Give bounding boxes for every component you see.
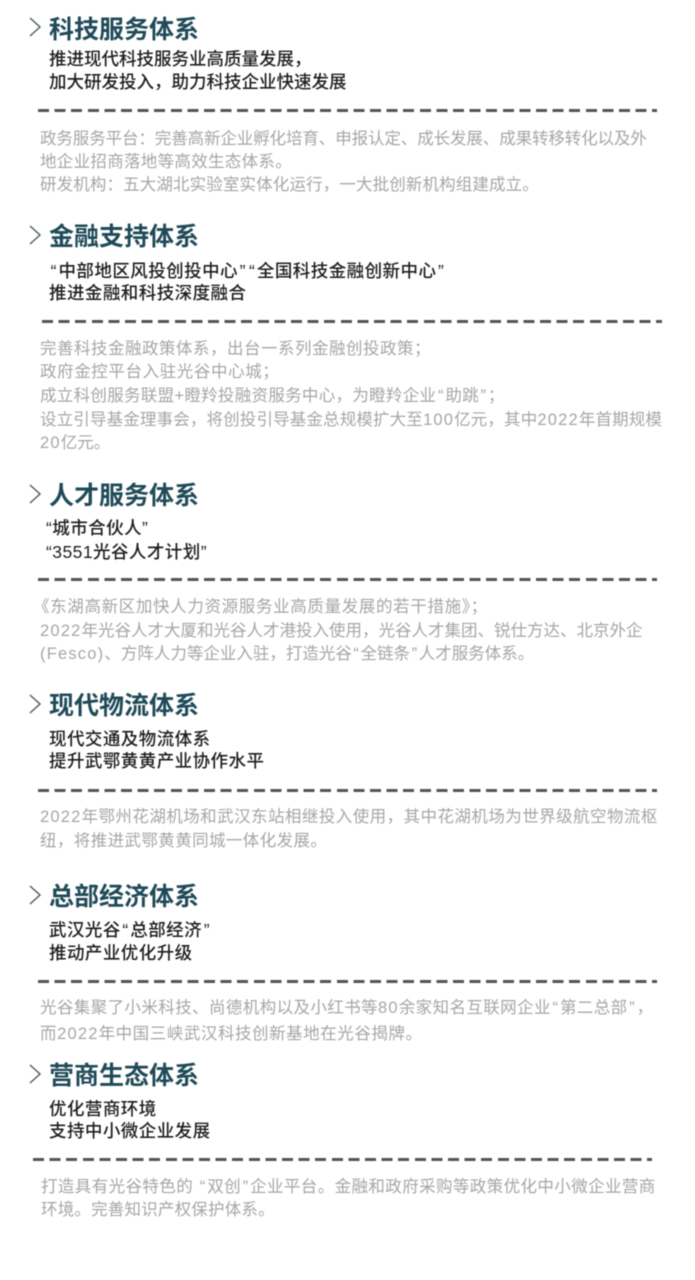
body text	[40, 129, 647, 194]
heading: 营商生态体系	[49, 1062, 199, 1090]
heading: 金融支持体系	[49, 223, 199, 251]
subheading	[48, 261, 444, 303]
panel: 现代物流体系	[29, 692, 658, 850]
subheading: 武汉光谷“总部经济”	[49, 920, 210, 940]
body text: 打造具有光谷特色的 “双创”企业平台。金融和政府采购等政策优化中小微企业营商	[41, 1178, 656, 1196]
divider	[38, 980, 657, 982]
subheading: “中部地区风投创投中心”“全国科技金融创新中心”	[51, 261, 444, 281]
body text	[40, 998, 654, 1043]
heading: 总部经济体系	[49, 883, 199, 911]
icon: chevron	[29, 885, 42, 905]
subheading	[48, 49, 346, 92]
body text	[33, 597, 643, 663]
body text: 地企业招商落地等高效生态体系。	[40, 153, 292, 171]
subheading: 支持中小微企业发展	[49, 1121, 211, 1141]
body text: (Fesco)、方阵人力等企业入驻，打造光谷“全链条”人才服务体系。	[40, 645, 534, 663]
body text: 20亿元。	[40, 434, 110, 452]
icon: chevron	[29, 225, 42, 245]
icon: chevron	[29, 484, 42, 504]
body text: 纽，将推进武鄂黄黄同城一体化发展。	[40, 832, 327, 850]
subheading: 推进现代科技服务业高质量发展，	[49, 49, 312, 69]
subheading	[46, 518, 207, 562]
body text: 光谷集聚了小米科技、尚德机构以及小红书等80余家知名互联网企业“第二总部”，	[40, 999, 654, 1017]
body text: 环境。完善知识产权保护体系。	[41, 1201, 275, 1219]
subheading	[49, 1099, 211, 1141]
panel: 总部经济体系	[29, 882, 658, 1043]
panel: 人才服务体系	[29, 482, 658, 663]
subheading	[48, 920, 210, 963]
body text: 《东湖高新区加快人力资源服务业高质量发展的若干措施》；	[33, 598, 488, 616]
icon: chevron	[29, 17, 42, 37]
body text	[40, 339, 662, 452]
icon: chevron	[29, 1064, 42, 1084]
subheading: 现代交通及物流体系	[49, 729, 211, 749]
divider	[33, 1158, 652, 1160]
divider	[38, 789, 657, 792]
heading: 现代物流体系	[49, 692, 199, 720]
subheading: 推进金融和科技深度融合	[49, 283, 246, 303]
body text	[40, 807, 658, 850]
heading: 科技服务体系	[49, 16, 199, 44]
divider	[38, 578, 657, 580]
subheading	[48, 729, 264, 771]
body text: 研发机构：五大湖北实验室实体化运行，一大批创新机构组建成立。	[40, 176, 539, 194]
divider	[38, 109, 657, 112]
subheading: 加大研发投入，助力科技企业快速发展	[49, 72, 346, 92]
panel: 金融支持体系	[29, 222, 663, 452]
panel: 营商生态体系	[29, 1061, 656, 1219]
body text: 而2022年中国三峡武汉科技创新基地在光谷揭牌。	[40, 1025, 423, 1043]
divider	[42, 320, 662, 322]
panel: 科技服务体系	[29, 16, 658, 194]
body text: 2022年光谷人才大厦和光谷人才港投入使用，光谷人才集团、锐仕方达、北京外企	[40, 622, 643, 640]
subheading: “城市合伙人”	[46, 518, 148, 538]
body text: 完善科技金融政策体系，出台一系列金融创投政策；	[40, 340, 431, 358]
subheading: 提升武鄂黄黄产业协作水平	[49, 751, 264, 771]
body text	[41, 1177, 656, 1219]
subheading: 优化营商环境	[49, 1099, 157, 1119]
body text: 政府金控平台入驻光谷中心城；	[40, 363, 279, 381]
body text: 2022年鄂州花湖机场和武汉东站相继投入使用，其中花湖机场为世界级航空物流枢	[40, 808, 658, 826]
icon: chevron	[29, 694, 42, 714]
heading: 人才服务体系	[49, 482, 199, 510]
body text: 设立引导基金理事会，将创投引导基金总规模扩大至100亿元，其中2022年首期规模	[40, 411, 662, 429]
subheading: “3551光谷人才计划”	[46, 542, 207, 562]
subheading: 推动产业优化升级	[49, 943, 193, 963]
body text: 成立科创服务联盟+瞪羚投融资服务中心，为瞪羚企业“助跳”；	[40, 387, 505, 405]
body text: 政务服务平台：完善高新企业孵化培育、申报认定、成长发展、成果转移转化以及外	[40, 130, 647, 148]
